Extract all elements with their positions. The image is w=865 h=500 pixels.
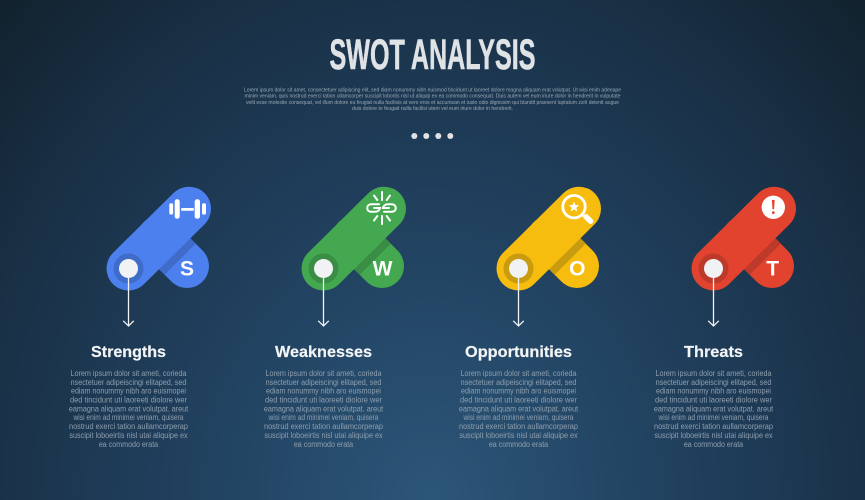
icon: broken link xyxy=(367,192,396,224)
body text: ediam nonummy nibh aro euismopei xyxy=(71,387,186,396)
opportunities badge xyxy=(504,209,586,284)
body text: ea commodo erata xyxy=(99,440,159,449)
body text: nsectetuer adipeiscingi elitaped, sed xyxy=(71,378,186,387)
body text: ded tincidunt uti laoreeti diolore wer xyxy=(460,396,577,404)
body text: ded tincidunt uti laoreeti diolore wer xyxy=(70,396,187,404)
body text xyxy=(69,369,189,449)
body text xyxy=(654,369,774,449)
panel: opportunities xyxy=(459,196,590,449)
body text: suscipit loboeirtis nisl utai aliquipe ex xyxy=(654,431,773,440)
body text: Lorem ipsum dolor sit ameti, corieda xyxy=(266,369,382,378)
intro text xyxy=(244,88,621,112)
pagination dots xyxy=(411,133,453,139)
intro text: minim veniam, quis nostrud exerci tation ullamcorper suscipit lobortis nisl ut aliquip ex ea commodo consequat. Duis autem vel eum iriure dolor in hendrerit in vulputate xyxy=(244,94,621,100)
body text: ea commodo erata xyxy=(489,440,549,449)
body text: nostrud exerci tation aullamcorperap xyxy=(69,422,189,431)
intro text: velit esse molestie consequat, vel illum dolore eu feugiat nulla facilisis at vero eros et accumsan et iusto odio dignissim qui blandit praesent luptatum zzril delenit augue xyxy=(246,100,619,106)
intro text: Lorem ipsum dolor sit amet, consectetuer adipiscing elit, sed diam nonummy nibh euismod tincidunt ut laoreet dolore magna aliquam erat volutpat. Ut wisi enim adenape xyxy=(244,88,621,94)
body text: suscipit loboeirtis nisl utai aliquipe ex xyxy=(459,431,578,440)
body text: Lorem ipsum dolor sit ameti, corieda xyxy=(70,369,187,378)
body text xyxy=(459,369,579,449)
intro text: duis dolore te feugait nulla facilisi utem vel eum iriure dolor in hendrerit. xyxy=(352,106,513,112)
weaknesses badge xyxy=(308,209,391,284)
heading: Threats: Threats xyxy=(684,344,743,361)
body text: ea commodo erata xyxy=(294,440,354,449)
title: SWOT ANALYSIS xyxy=(330,31,536,79)
panel: threats xyxy=(654,196,785,449)
body text: wisi enim ad minimei veniam, quisera xyxy=(73,413,184,422)
arrow xyxy=(513,276,524,326)
heading: Opportunities: Opportunities xyxy=(465,344,572,361)
body text: eamagna aliquam erat volutpat. areut xyxy=(69,404,189,413)
arrow xyxy=(123,276,134,326)
letter O: O xyxy=(569,258,585,280)
panel: strengths xyxy=(69,199,206,449)
body text: ediam nonummy nibh aro euismopei xyxy=(461,387,576,396)
icon: magnifier with star xyxy=(563,196,590,221)
heading: Strengths: Strengths xyxy=(91,344,166,361)
body text: nsectetuer adipeiscingi elitaped, sed xyxy=(461,378,576,387)
body text: wisi enim ad minimei veniam, quisera xyxy=(268,413,379,422)
body text: wisi enim ad minimei veniam, quisera xyxy=(463,413,574,422)
panel: weaknesses xyxy=(264,192,396,449)
body text: eamagna aliquam erat volutpat. areut xyxy=(459,404,579,413)
body text: nsectetuer adipeiscingi elitaped, sed xyxy=(266,378,381,387)
body text: ded tincidunt uti laoreeti diolore wer xyxy=(265,396,382,404)
arrow xyxy=(708,276,719,326)
heading: Weaknesses: Weaknesses xyxy=(275,344,372,361)
body text: ediam nonummy nibh aro euismopei xyxy=(656,387,771,396)
icon: dumbbell xyxy=(169,199,206,219)
threats badge xyxy=(698,209,781,284)
body text: nostrud exerci tation aullamcorperap xyxy=(264,422,384,431)
letter W: W xyxy=(373,258,393,280)
body text: ediam nonummy nibh aro euismopei xyxy=(266,387,381,396)
body text xyxy=(264,369,384,449)
letter T: T xyxy=(766,258,779,280)
body text: eamagna aliquam erat volutpat. areut xyxy=(654,404,774,413)
arrow xyxy=(318,276,329,326)
body text: ea commodo erata xyxy=(684,440,744,449)
body text: nostrud exerci tation aullamcorperap xyxy=(459,422,579,431)
body text: ded tincidunt uti laoreeti diolore wer xyxy=(655,396,772,404)
body text: wisi enim ad minimei veniam, quisera xyxy=(658,413,769,422)
body text: eamagna aliquam erat volutpat. areut xyxy=(264,404,384,413)
body text: Lorem ipsum dolor sit ameti, corieda xyxy=(656,369,772,378)
body text: Lorem ipsum dolor sit ameti, corieda xyxy=(460,369,577,378)
strengths badge xyxy=(114,209,196,284)
letter S: S xyxy=(180,258,194,280)
body text: suscipit loboeirtis nisl utai aliquipe ex xyxy=(69,431,188,440)
icon: warning xyxy=(762,196,785,219)
body text: suscipit loboeirtis nisl utai aliquipe ex xyxy=(264,431,383,440)
body text: nostrud exerci tation aullamcorperap xyxy=(654,422,774,431)
body text: nsectetuer adipeiscingi elitaped, sed xyxy=(656,378,771,387)
